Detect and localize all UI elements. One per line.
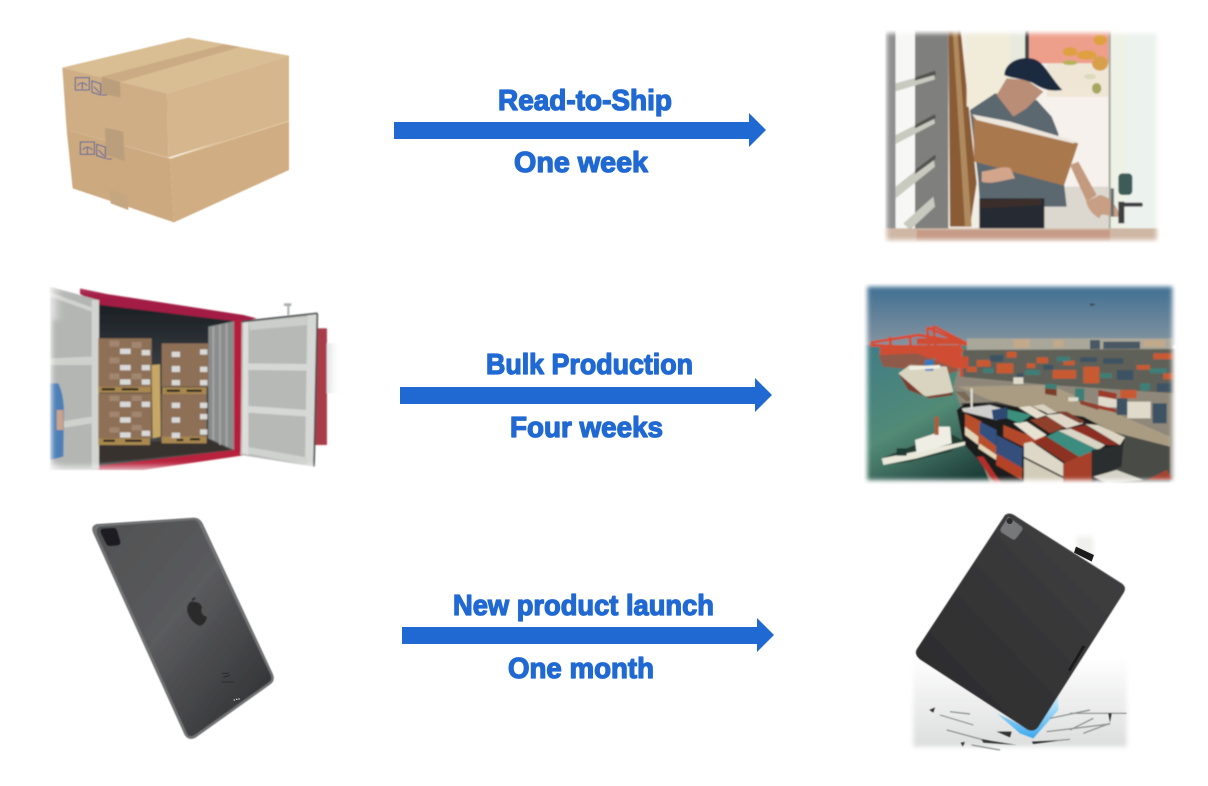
- tablet body: [92, 518, 274, 739]
- apple logo: [187, 597, 207, 626]
- label: One week: One week: [514, 147, 649, 179]
- row 2: Bulk Production: [400, 349, 772, 444]
- image: delivery man at door: [883, 30, 1160, 243]
- connector dots: [234, 698, 240, 701]
- tablet back panel: [97, 520, 271, 736]
- case body: [916, 513, 1125, 731]
- arrow 3: [402, 618, 774, 652]
- arrow 2: [400, 378, 772, 412]
- image: cardboard boxes: [62, 38, 289, 222]
- arrow 1: [394, 113, 766, 147]
- label: Bulk Production: Bulk Production: [486, 349, 693, 381]
- lens: [1007, 518, 1013, 524]
- label: One month: One month: [508, 653, 654, 685]
- camera cutout: [1000, 517, 1023, 540]
- camera module: [101, 528, 120, 546]
- label: Read-to-Ship: Read-to-Ship: [498, 85, 672, 117]
- image: container loaded with pallets: [50, 287, 340, 470]
- image: container port aerial: [863, 283, 1177, 487]
- engraved text marks: [221, 673, 233, 682]
- image: tablet back view: [92, 518, 274, 739]
- label: New product launch: New product launch: [453, 590, 714, 622]
- side button slot: [1068, 645, 1085, 672]
- image: rugged tablet case drop test: [913, 513, 1127, 750]
- row 1: Read-to-Ship: [394, 85, 766, 179]
- row 3: New product launch: [402, 590, 774, 685]
- label: Four weeks: Four weeks: [510, 412, 663, 444]
